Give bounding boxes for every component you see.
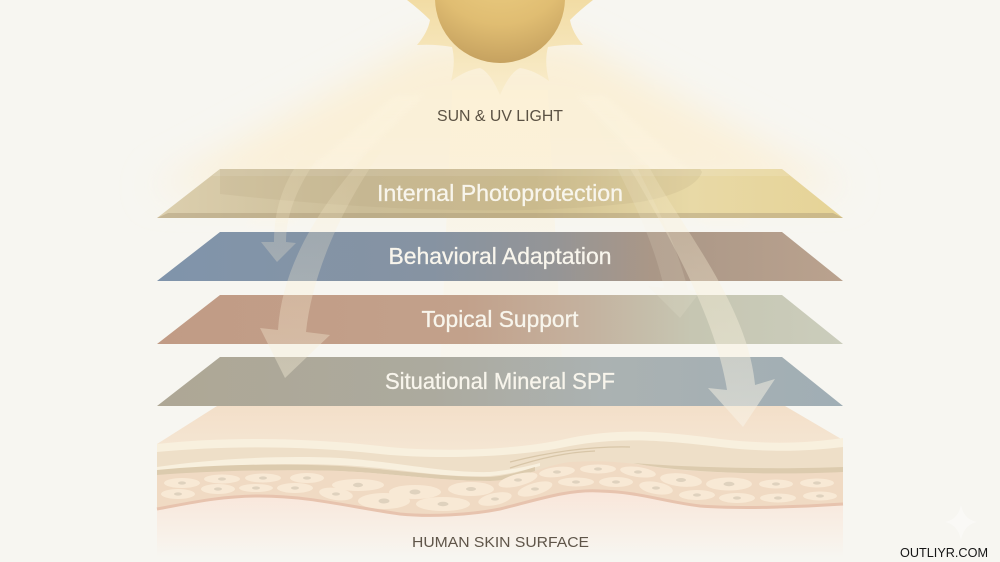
layer: Behavioral Adaptation: [157, 232, 843, 281]
arrow: long right: [628, 165, 775, 427]
arrow: faint inner right: [595, 120, 700, 318]
brand: outliyr.com: OUTLIYR.COM: [900, 546, 988, 560]
layer: Internal Photoprotection: [157, 169, 843, 218]
arrow: long left: [260, 150, 382, 378]
sun disc: [435, 0, 565, 63]
light rays fan: [150, 40, 850, 420]
layer: Situational Mineral SPF: [157, 357, 843, 406]
label: human skin surface: HUMAN SKIN SURFACE: [412, 534, 589, 551]
second light band: [157, 457, 540, 476]
arrow: short left: [261, 160, 316, 262]
skin top surface: [157, 406, 843, 450]
underlying tissue fade: [157, 492, 843, 558]
skin upper layer: [157, 434, 843, 556]
pink basal line: [157, 491, 843, 515]
layer: Situational Mineral SPF: Situational Mineral SPF: [385, 368, 615, 394]
label: sun and UV light: SUN & UV LIGHT: [437, 108, 563, 125]
sun rays: [407, 0, 593, 95]
cell layer: [157, 461, 843, 516]
skin surface highlight band: [157, 432, 843, 457]
layer: Behavioral Adaptation: Behavioral Adaptation: [388, 243, 612, 269]
layer: Topical Support: Topical Support: [422, 306, 579, 332]
cell nuclei: [174, 467, 824, 506]
layer: Internal Photoprotection: Internal Photoprotection: [377, 180, 623, 206]
dark tan band left: [157, 465, 535, 481]
human skin cross-section: [157, 406, 843, 558]
fine skin lines: [510, 447, 630, 468]
icon: watermark sparkle: [945, 505, 977, 540]
dark tan band right: [633, 463, 843, 474]
layer: Topical Support: [157, 295, 843, 344]
sun: [407, 0, 593, 95]
skin cells: [161, 464, 837, 511]
